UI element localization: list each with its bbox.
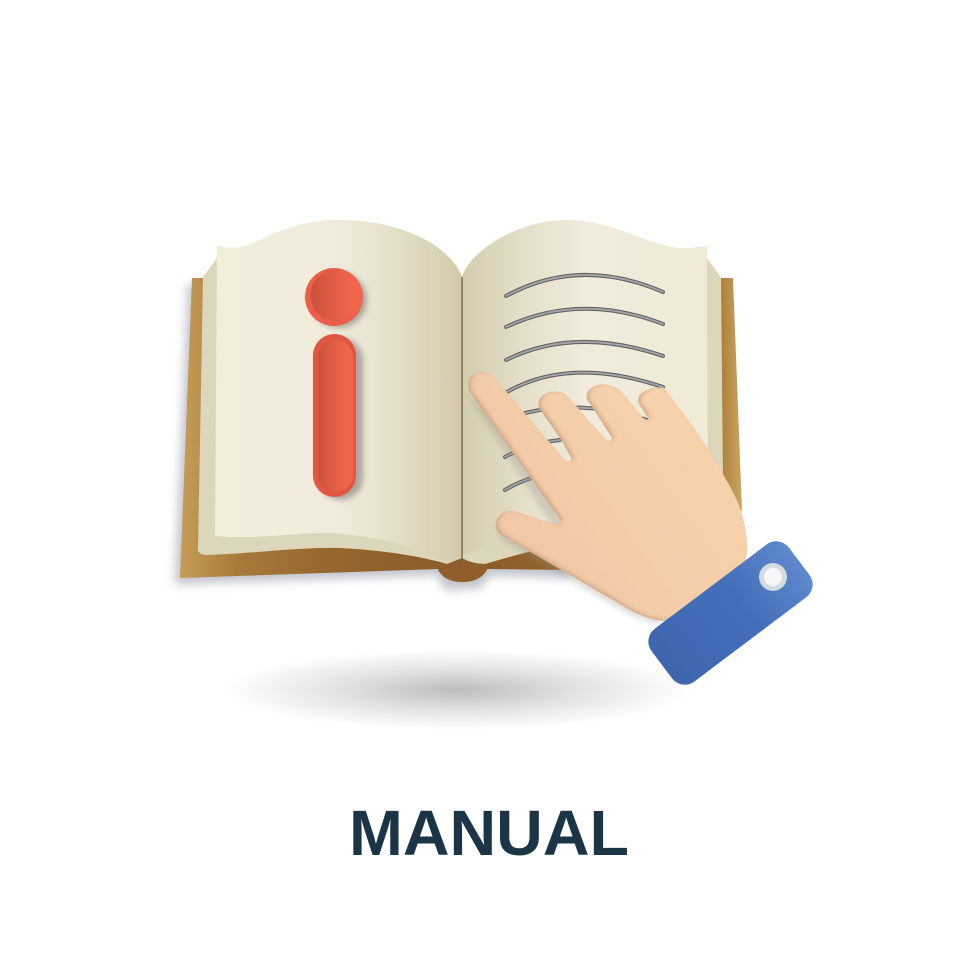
info symbol <box>305 268 367 500</box>
page stack right <box>462 258 723 564</box>
book <box>175 220 742 590</box>
page stack left <box>198 258 462 564</box>
right page <box>462 220 708 556</box>
hand shadow <box>467 394 698 624</box>
info dot <box>305 268 367 328</box>
info stem <box>313 334 363 500</box>
book spine <box>438 564 487 582</box>
book cover shadow <box>175 284 570 590</box>
cuff button <box>759 563 787 591</box>
ground shadow <box>223 650 693 730</box>
book gutter <box>461 277 463 558</box>
shirt cuff <box>642 535 819 691</box>
left page <box>215 220 462 563</box>
pointing hand <box>467 372 747 624</box>
text lines <box>505 275 663 490</box>
hand shape <box>468 372 747 621</box>
book cover <box>180 278 742 578</box>
title: MANUAL <box>349 797 629 869</box>
